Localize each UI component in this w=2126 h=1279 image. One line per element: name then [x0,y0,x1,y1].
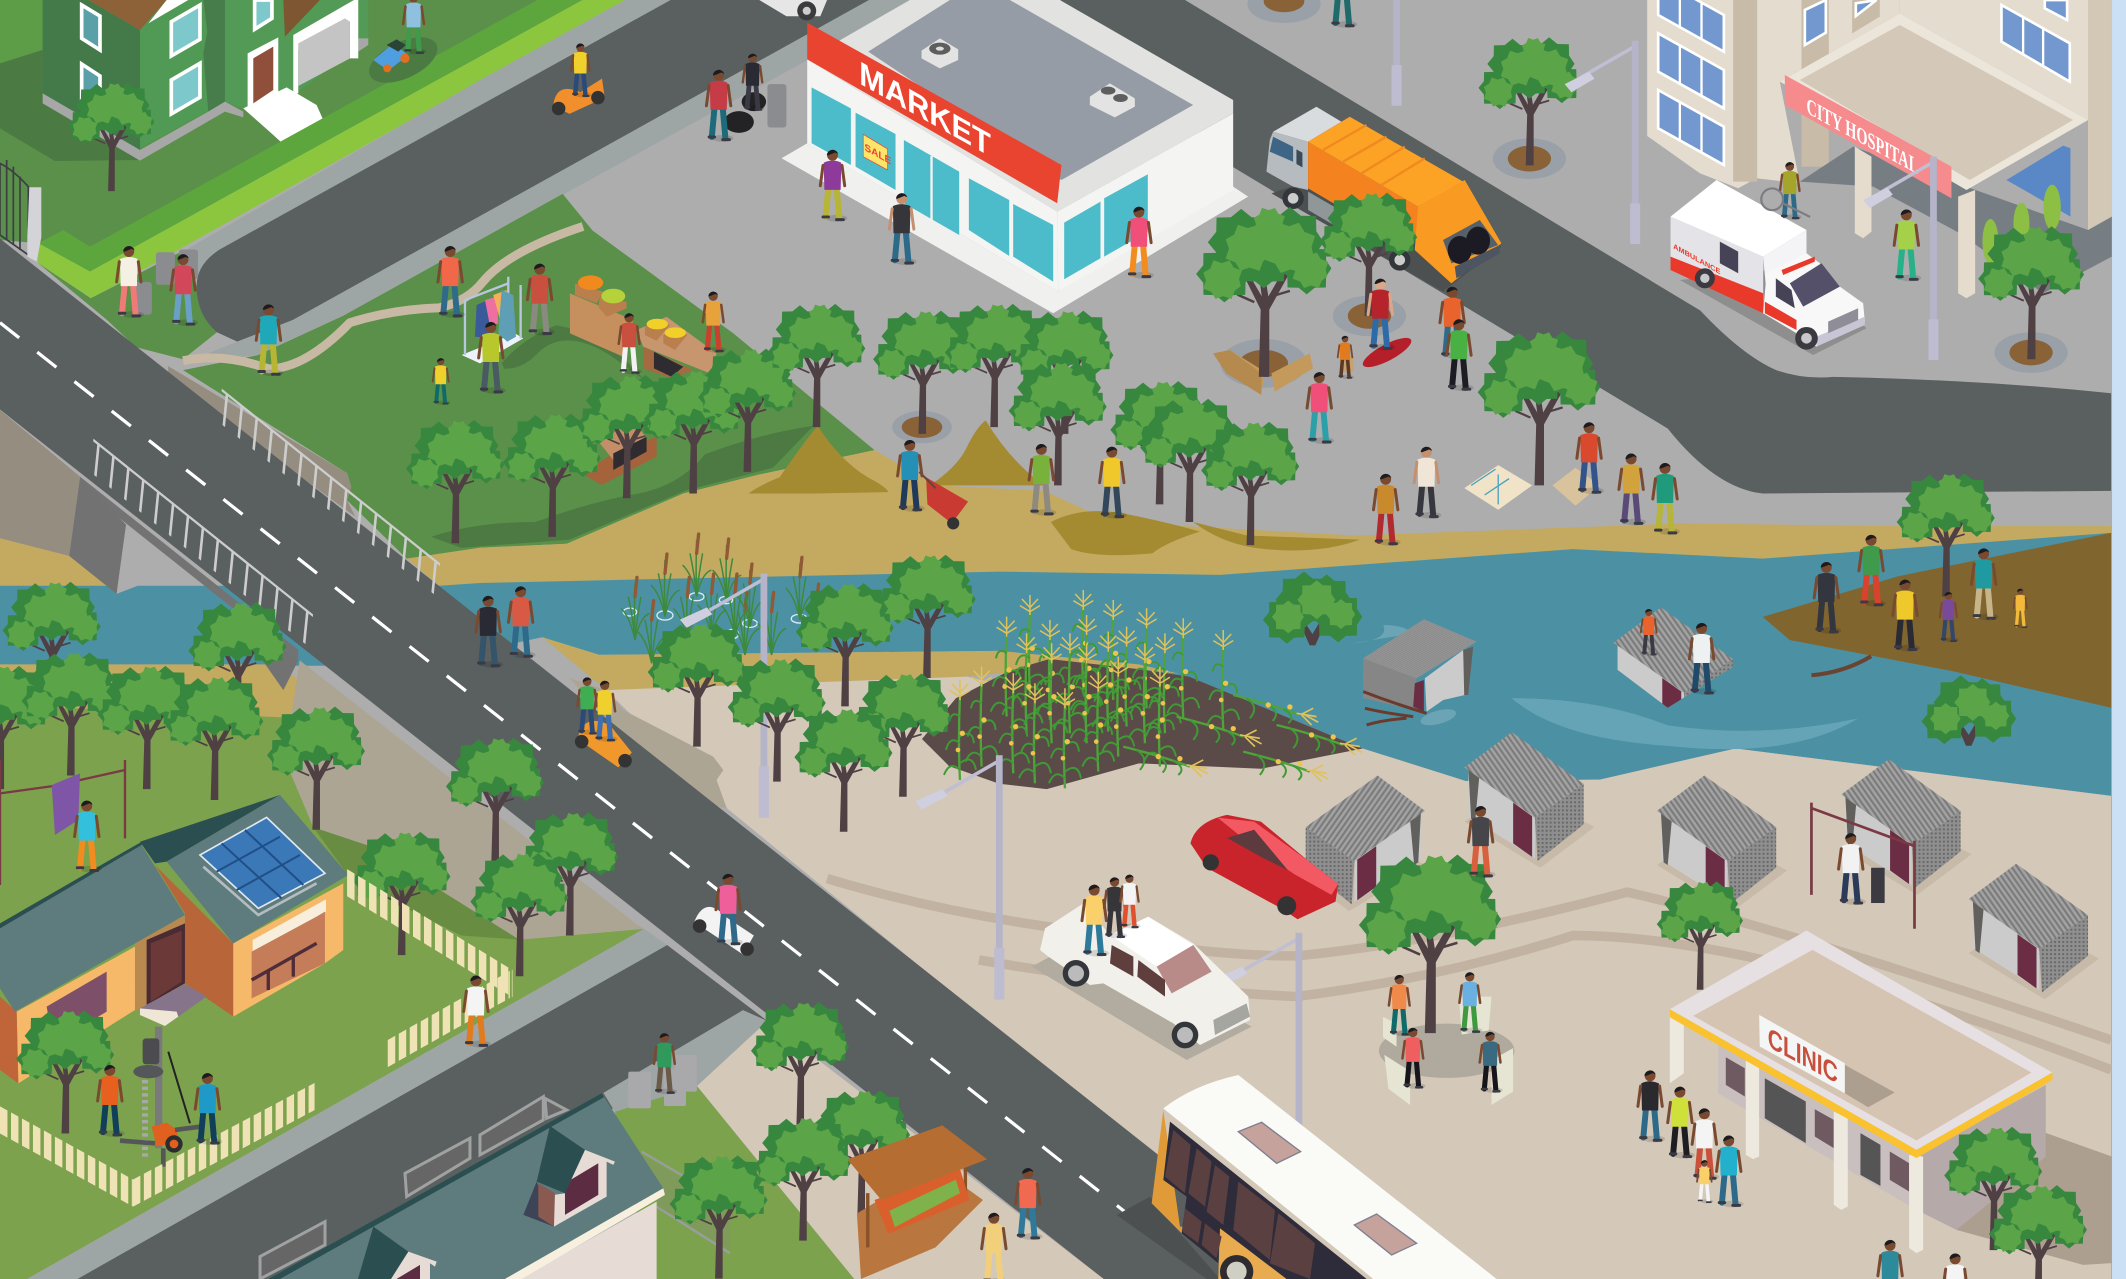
clinic sign shadow [1845,1065,1895,1107]
canopy rim [1780,13,2088,190]
box front [1763,230,1806,293]
shelters [1295,732,2099,999]
scooters [552,79,754,956]
picket fences [0,883,513,1193]
windows [82,0,272,114]
canopy roof [1800,25,2073,180]
market roof [868,0,1193,180]
rig motor [143,1038,159,1064]
sand behind crops [999,651,1180,674]
river ripples [1512,698,1858,749]
truck window [1296,149,1302,167]
black rubbish bags [724,92,766,133]
front wall [17,947,135,1083]
truck wheels [1282,188,1304,209]
gate post [27,187,41,262]
upper vehicle [759,0,827,20]
chain fence [642,1152,730,1253]
car top [1218,818,1338,895]
market [782,0,1248,313]
sale poster [863,134,891,170]
box side [1671,217,1763,313]
door wall [135,915,185,1012]
hospital entrance [2006,146,2070,217]
car body [1190,815,1338,919]
truck top [1308,117,1463,207]
wetland reeds [621,534,831,663]
cab roof [1110,917,1193,967]
auger [136,1080,154,1157]
bus shadow [1117,1197,1220,1279]
lawn base [0,0,567,267]
clinic shadow [1956,1133,2112,1265]
clinic doors [1765,1078,1880,1186]
bus wheel [1220,1255,1253,1279]
dormer roof [537,1126,585,1193]
door divider [928,156,935,220]
bus window band [1163,1122,1367,1279]
chain fence mesh [642,1155,730,1250]
flooded shelter with root [1353,619,1477,728]
truck rear bumper [1455,245,1500,278]
bridge railing near [92,440,313,632]
table base [643,347,693,378]
truck windscreen [1270,137,1293,162]
bin sidewalk [603,1010,767,1112]
clinic front wall [1718,1043,1916,1210]
rig feet [120,1127,200,1167]
foundation [43,93,243,161]
riverside trees [648,551,977,832]
end strip [1463,647,1473,695]
meeting shade [1379,1024,1515,1078]
house shadow on lawn [0,50,140,161]
ambulance shadow [1680,267,1866,355]
road fences [260,1097,567,1279]
orange house lot [0,760,348,1167]
clothesline [0,760,125,885]
market right wall [1057,113,1233,292]
roof hatches [1238,1122,1301,1163]
hospital right block [1900,0,2112,230]
bridge beam [80,477,298,660]
roof units [922,38,1135,117]
red stripe [1671,257,1763,313]
shelf boxes [575,283,603,303]
embankment by road [569,678,727,808]
roofs [88,0,167,30]
sand left [0,538,206,597]
bus panes [1165,1130,1315,1279]
truck chassis [1308,192,1340,227]
river bushes [1263,571,2016,746]
sale poster: SALE [865,142,891,168]
drum and guitar case [1340,333,1415,372]
crop island [922,656,1363,789]
bus roof [1163,1075,1497,1279]
lower-left embankment [285,660,644,940]
market sign text: MARKET [859,54,991,165]
park shadow patch [502,325,644,380]
pickup shadow [1032,937,1252,1060]
right page margin [2112,0,2126,1279]
house left wall [43,0,140,160]
roof ridge [267,1093,604,1279]
roof right [167,795,348,943]
clinic end wall [1916,1085,2046,1230]
window mullions [1680,0,2043,152]
sand strip south of river [542,637,1085,690]
clothes rack [462,277,523,363]
house right wall [233,883,343,1017]
green corner at bins [38,251,217,359]
garbage truck [1266,107,1501,292]
mesh wall [1363,658,1417,710]
bus front [1152,1110,1287,1279]
stall counter [857,1166,983,1279]
benches [1213,350,1313,395]
rig wheel [165,1135,183,1153]
upper sidewalk [182,0,671,278]
left end [0,997,18,1083]
rig mast [155,1027,162,1148]
sand strip under left trees [0,664,312,719]
darker lawn patch [313,827,519,940]
wheels [1063,960,1089,987]
side window [1776,278,1795,308]
right mud bank [1763,533,2111,708]
aid boxes [1464,465,1600,510]
hospital left block [1647,0,1900,188]
beige ground [606,677,2111,1279]
dormer wall [554,1150,615,1227]
road centre dashes [0,323,1209,1279]
side windows [1110,945,1133,977]
cab door red [1765,302,1796,330]
park market stalls [462,275,717,485]
tomatoes tray [875,1169,969,1234]
bus [1117,1075,1497,1279]
roof left [0,845,185,1012]
truck rear frame [1415,180,1501,283]
floating branch [1811,656,1871,675]
main road [0,239,1315,1279]
top-left lawn [0,0,667,333]
ambulance [1671,180,1866,355]
limes [601,289,625,303]
house wall [520,1202,657,1279]
light sidewalk strip [183,0,917,363]
corn crop [944,590,1362,788]
stall posts [868,1155,965,1247]
hospital recess bands [1733,0,1880,182]
water streak [1419,706,1458,728]
park path [183,226,583,369]
rig platform [133,1065,163,1078]
under canopy shade [1800,147,2112,293]
lower side road [77,945,767,1279]
far abutment [248,624,298,690]
park trees [68,34,2086,597]
iron gate [0,160,28,255]
washing line [1811,803,1914,929]
lower-left trees [0,579,620,976]
market windows [812,87,1148,282]
truck cab side [1266,132,1308,190]
lawn near lower house [615,1086,854,1279]
house roof back [140,795,280,863]
produce stall [847,1125,987,1279]
clinic windows [1726,1057,1909,1192]
door [248,37,278,108]
street lamps [680,0,1938,1177]
park roadside bank [168,366,355,517]
trash bins [628,1055,697,1108]
lawn bright corner [0,0,43,63]
clinic sign text: CLINIC [1768,1022,1838,1090]
rig engine [152,1123,177,1147]
porch steps [243,87,323,143]
truck side [1308,142,1421,243]
door [1413,680,1424,712]
upper road [197,0,869,342]
park lawn [183,194,875,559]
trash bins top [133,84,786,315]
second flooded shelter [1512,607,1858,749]
kiosk [582,420,657,485]
left bank wall [0,410,80,556]
garage band [253,899,326,952]
wall [1425,650,1465,712]
entrance step [140,984,207,1025]
pickup truck [1032,903,1252,1060]
bumper [1816,317,1865,347]
truck cab top [1273,107,1341,142]
table [637,317,717,373]
eave [503,1188,665,1279]
hospital windows [1658,0,2070,165]
hospital [1647,0,2112,355]
box window [1720,242,1738,273]
lawn mower [362,28,444,92]
greens tray [889,1180,960,1227]
windscreen [1157,945,1212,993]
house brick wall [155,865,233,1017]
canopy columns [1855,147,1975,298]
panel frame [203,867,317,915]
grille [1828,308,1858,333]
truck top seams [1323,125,1425,185]
tree pits [892,0,2068,443]
dormer shadow [523,1182,554,1227]
lower corner pavement [697,1021,1104,1279]
truck rear opening [1443,220,1498,263]
water line [1607,662,1749,743]
market sign [807,23,1062,203]
grille [1213,1003,1250,1035]
second dormer [357,1227,437,1279]
produce shelf [570,293,633,357]
lower house group [260,1055,730,1279]
meeting chairs [1383,997,1513,1105]
park shadow band [431,426,814,548]
right road [1060,0,2111,494]
bridge railing far [220,390,440,581]
front window [47,972,107,1043]
clinic columns [1670,1015,1923,1253]
hedge side [38,0,625,298]
market plinth [782,143,1248,313]
house yard tree [16,1007,116,1134]
car windows [1227,830,1288,870]
water streak [1353,625,1413,643]
main roof [267,1093,663,1279]
bridge abutment [69,477,126,594]
fallen root [1363,692,1427,725]
dormer brick [538,1183,555,1227]
clinic trim [1670,1009,2052,1158]
planted shrubs [1982,185,2061,264]
solar panels [200,817,325,908]
river [0,533,2111,796]
clinic roof rim [1670,931,2052,1150]
pickup body [1040,903,1250,1045]
lower-left lawn [0,705,644,1279]
banana boxes [645,320,670,341]
front door [147,923,185,1005]
dormer window [565,1163,598,1215]
windscreen [1790,263,1840,307]
garage [293,0,358,93]
ground tracks [827,879,2111,1070]
clinic roof [1693,950,2031,1141]
ripple over water line [1512,698,1858,749]
clinic front tree group [1359,850,2089,1279]
oranges [578,275,603,290]
clinic [1670,931,2112,1265]
wheels [1795,327,1818,350]
light bar [1782,257,1815,275]
corner trees [670,999,912,1279]
hospital sign text: CITY HOSPITAL [1806,93,1918,180]
garage door [252,912,325,998]
cab [1763,253,1865,347]
hedge top [38,0,583,272]
market left wall [807,59,1058,292]
rig brace [168,1052,190,1123]
wheelbarrow [919,472,968,529]
bus lower side [1218,1228,1287,1279]
sand main bank [407,450,2111,591]
wheelchair [1761,188,1810,217]
dirt mounds and patches [748,420,1360,555]
stall canopy [847,1125,987,1200]
wall recess [203,0,225,112]
house right wall [225,0,368,110]
side road sidewalk [27,929,667,1279]
green house [43,0,368,161]
right column [2088,0,2112,230]
ambulance label: AMBULANCE [1673,242,1720,276]
truck shadow [1271,173,1501,292]
hospital sign [1785,75,1951,198]
clinic sign [1759,1015,1845,1093]
bridge abutment light face [117,525,176,594]
car wheels [1203,854,1219,870]
market roof rim [807,0,1233,212]
roof [1363,619,1477,678]
box top [1671,180,1806,257]
rubbish bags [1448,236,1472,264]
red car [1190,815,1338,919]
house centre wall [140,0,225,148]
